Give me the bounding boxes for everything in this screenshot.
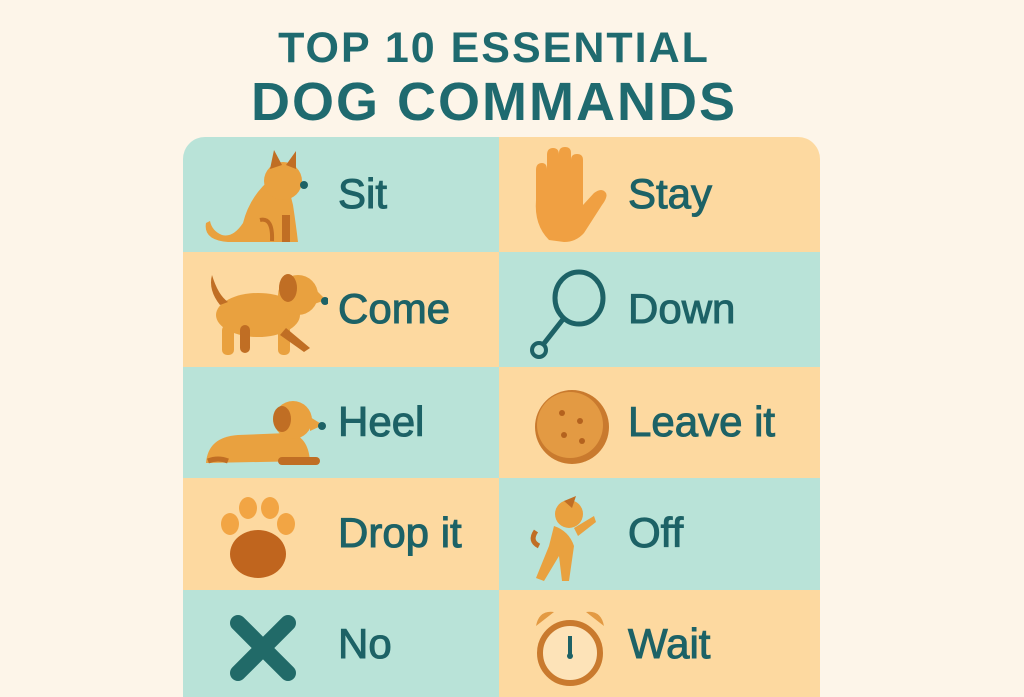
icon: X mark — [230, 615, 296, 681]
title: TOP 10 ESSENTIAL — [278, 24, 710, 72]
cell: Drop it: Drop it — [338, 509, 462, 556]
icon: jumping dog — [530, 496, 596, 581]
cell: Wait — [499, 590, 820, 697]
icon: lying dog — [206, 401, 326, 465]
icon: paw print — [221, 497, 295, 578]
cell: No — [183, 590, 499, 697]
cell: Off — [499, 478, 820, 590]
cell: Down — [499, 252, 820, 367]
icon: cookie — [535, 390, 609, 464]
cell: Leave it: Leave it — [628, 398, 775, 445]
cell: Heel — [183, 367, 499, 478]
cell: Come: Come — [338, 285, 450, 332]
title — [251, 24, 737, 132]
cell: Leave it — [499, 367, 820, 478]
cell: Heel: Heel — [338, 398, 424, 445]
cell: Off: Off — [628, 509, 683, 556]
cell: Down: Down — [628, 285, 735, 332]
cell: Stay — [499, 137, 820, 252]
title: DOG COMMANDS — [251, 72, 737, 132]
cell: Drop it — [183, 478, 499, 590]
cell: No: No — [338, 620, 392, 667]
cell: Come — [183, 252, 499, 367]
icon: walking dog — [211, 274, 328, 355]
cell: Sit — [183, 137, 499, 252]
icon: alarm clock — [536, 612, 604, 686]
cell: Stay: Stay — [628, 170, 712, 217]
cell: Wait: Wait — [628, 620, 710, 667]
cell: Sit: Sit — [338, 170, 387, 217]
icon: hand — [536, 147, 606, 242]
icon: leash — [530, 270, 606, 359]
panel: command grid — [183, 137, 820, 697]
icon: sitting dog — [206, 150, 308, 242]
